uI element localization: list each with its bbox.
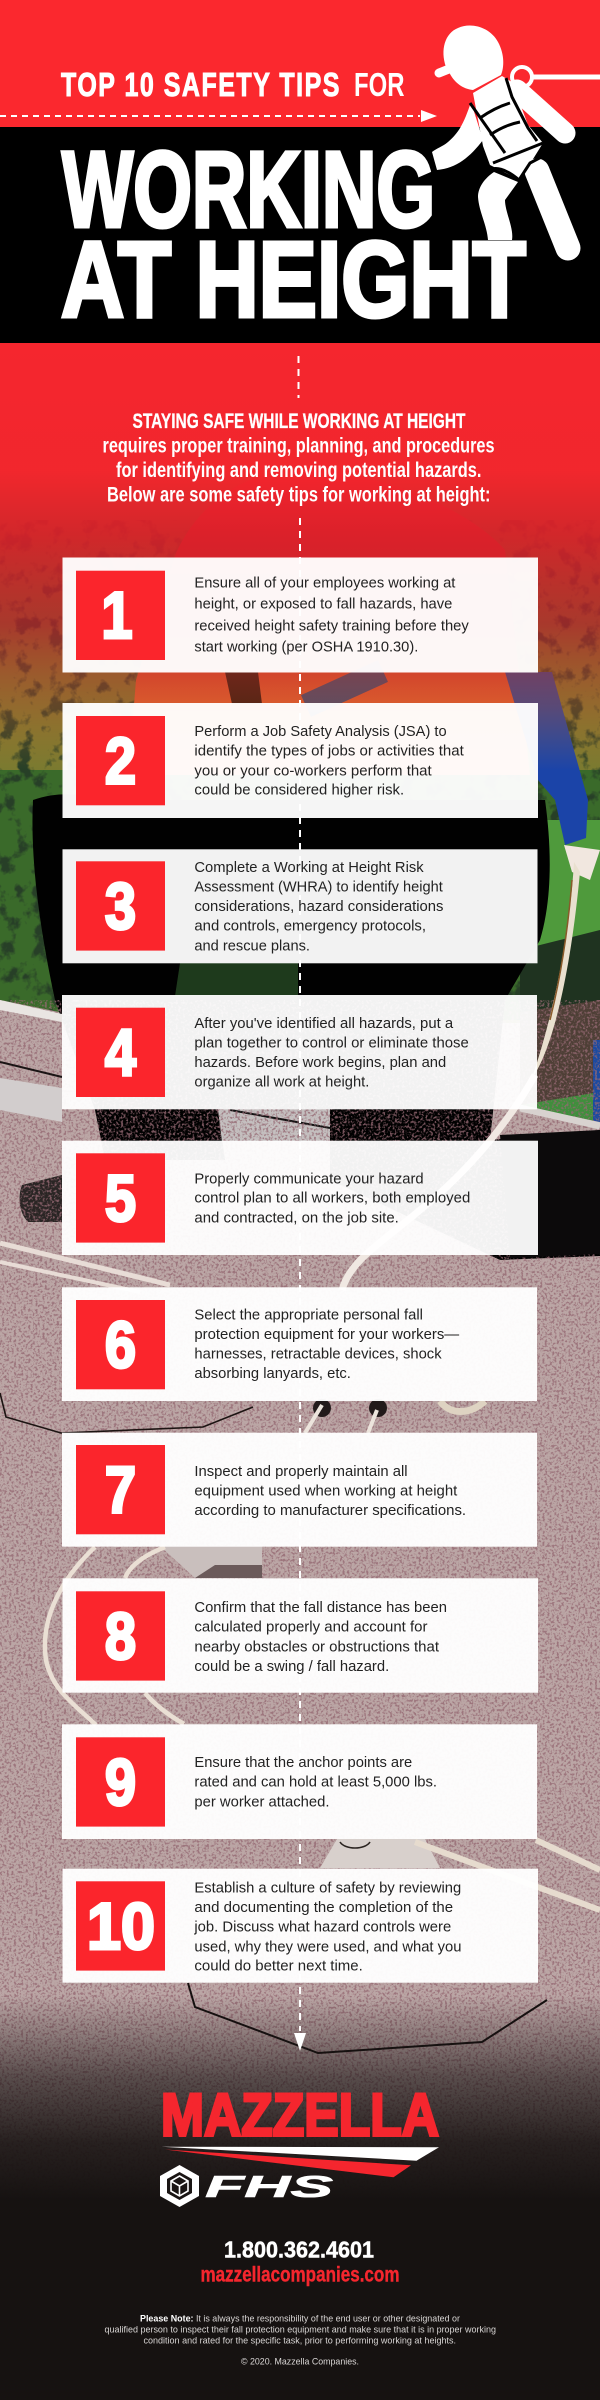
dashed connector through the tips — [299, 518, 301, 2031]
panel: tip 4: 4 — [105, 1016, 136, 1089]
title: working at height: WORKING — [62, 128, 435, 250]
panel: tip 7: 7 — [105, 1453, 136, 1527]
panel: tip 3: and controls, emergency protocols, — [194, 918, 426, 935]
panel: tip 6: harnesses, retractable devices, shock — [194, 1345, 442, 1362]
header red band — [0, 0, 600, 127]
panel: tip 7 — [62, 1433, 537, 1547]
panel: tip 9: 9 — [105, 1746, 136, 1819]
panel: tip 4: hazards. Before work begins, plan and — [194, 1054, 446, 1071]
panel: tip 10: job. Discuss what hazard controls were — [193, 1919, 451, 1936]
panel: tip 6: 6 — [105, 1308, 136, 1382]
panel: tip 10: 10 — [87, 1890, 155, 1963]
subtitle: top 10 safety tips for: FOR — [354, 66, 405, 103]
panel: tip 1 — [62, 558, 538, 672]
disclaimer note: condition and rated for the specific task, prior to performing working at heights. — [144, 2335, 456, 2346]
panel: tip 4: After you've identified all hazards, put a — [194, 1015, 454, 1032]
panel: tip 1: Ensure all of your employees working at — [194, 574, 456, 591]
panel: tip 2: you or your co-workers perform that — [194, 763, 433, 780]
icon: worker in safety harness — [432, 26, 600, 248]
panel: tip 4: organize all work at height. — [194, 1074, 369, 1091]
subtitle: top 10 safety tips for: TOP 10 SAFETY TIPS — [61, 66, 341, 103]
title: working at height — [61, 128, 526, 340]
panel: tip 7: according to manufacturer specifications. — [194, 1502, 466, 1519]
panel: tip 7: equipment used when working at height — [194, 1483, 458, 1500]
panel: tip 3 — [62, 849, 538, 963]
disclaimer note — [104, 2314, 496, 2346]
panel: tip 3: and rescue plans. — [194, 937, 310, 954]
logo: Mazzella FHS — [160, 2082, 439, 2207]
panel: tip 9: per worker attached. — [194, 1793, 330, 1810]
panel: tip 10 — [62, 1869, 538, 1983]
panel: tip 6: protection equipment for your workers— — [194, 1326, 459, 1343]
panel: tip 9 — [62, 1724, 537, 1839]
panel: tip 7: Inspect and properly maintain all — [194, 1463, 408, 1480]
panel: tip 8 — [62, 1578, 538, 1693]
panel: tip 3: 3 — [105, 870, 136, 943]
panel: tip 2: could be considered higher risk. — [194, 782, 404, 799]
panel: tip 6: Select the appropriate personal fall — [194, 1306, 423, 1323]
contact: website: mazzellacompanies.com — [200, 2264, 400, 2287]
panel: tip 2 — [62, 703, 538, 818]
disclaimer note: qualified person to inspect their fall protection equipment and make sure that it is in proper working — [104, 2325, 496, 2336]
panel: tip 6: absorbing lanyards, etc. — [194, 1365, 351, 1382]
panel: tip 10: Establish a culture of safety by reviewing — [194, 1879, 461, 1896]
disclaimer note: Please Note: It is always the responsibility of the end user or other designated or — [140, 2314, 460, 2325]
intro dashed connector — [298, 356, 300, 398]
panel: tip 3: Complete a Working at Height Risk — [194, 859, 424, 876]
panel: tip 6 — [62, 1287, 537, 1401]
panel: tip 5 — [62, 1141, 538, 1255]
panel: tip 10: could do better next time. — [194, 1958, 363, 1975]
panel: tip 8: 8 — [105, 1600, 136, 1673]
logo: Mazzella FHS: MAZZELLA — [161, 2082, 439, 2148]
panel: tip 9: Ensure that the anchor points are — [194, 1754, 412, 1771]
panel: tip 1: 1 — [101, 579, 133, 652]
panel: tip 3: considerations, hazard considerations — [194, 898, 444, 915]
intro text block: for identifying and removing potential hazards. — [116, 459, 482, 482]
header black band — [0, 127, 600, 343]
copyright: © 2020. Mazzella Companies. — [241, 2356, 359, 2367]
panel: tip 2: identify the types of jobs or activities that — [194, 743, 465, 760]
panel: tip 4: plan together to control or eliminate those — [194, 1035, 469, 1052]
panel: tip 1: start working (per OSHA 1910.30). — [194, 639, 418, 656]
panel: tip 9: rated and can hold at least 5,000 lbs. — [194, 1774, 437, 1791]
panel: tip 2: 2 — [105, 724, 136, 798]
panel: tip 4 — [62, 995, 537, 1109]
intro text block: STAYING SAFE WHILE WORKING AT HEIGHT — [132, 410, 466, 433]
panel: tip 8: calculated properly and account for — [194, 1619, 428, 1636]
arrow: dashed header arrow — [0, 110, 437, 122]
panel: tip 10: and documenting the completion of the — [194, 1899, 453, 1916]
panel: tip 3: Assessment (WHRA) to identify height — [194, 879, 444, 896]
panel: tip 8: Confirm that the fall distance has been — [194, 1599, 447, 1616]
panel: tip 5: Properly communicate your hazard — [194, 1170, 424, 1187]
panel: tip 2: Perform a Job Safety Analysis (JSA) to — [194, 723, 447, 740]
panel: tip 8: nearby obstacles or obstructions that — [194, 1638, 440, 1655]
intro text block: requires proper training, planning, and procedures — [102, 434, 494, 458]
panel: tip 1: received height safety training before they — [194, 617, 469, 634]
contact: phone number: 1.800.362.4601 — [224, 2237, 374, 2263]
panel: tip 5: control plan to all workers, both employed — [194, 1190, 470, 1207]
intro text block: Below are some safety tips for working at height: — [107, 484, 490, 506]
arrow: bottom dashed arrow head — [294, 2033, 306, 2051]
intro text block — [102, 410, 494, 506]
panel: tip 1: height, or exposed to fall hazards, have — [194, 596, 452, 613]
panel: tip 5: 5 — [105, 1162, 136, 1235]
panel: tip 5: and contracted, on the job site. — [194, 1209, 399, 1226]
panel: tip 8: could be a swing / fall hazard. — [194, 1658, 389, 1675]
panel: tip 10: used, why they were used, and what you — [194, 1938, 462, 1955]
logo: Mazzella FHS: FHS — [205, 2169, 334, 2204]
